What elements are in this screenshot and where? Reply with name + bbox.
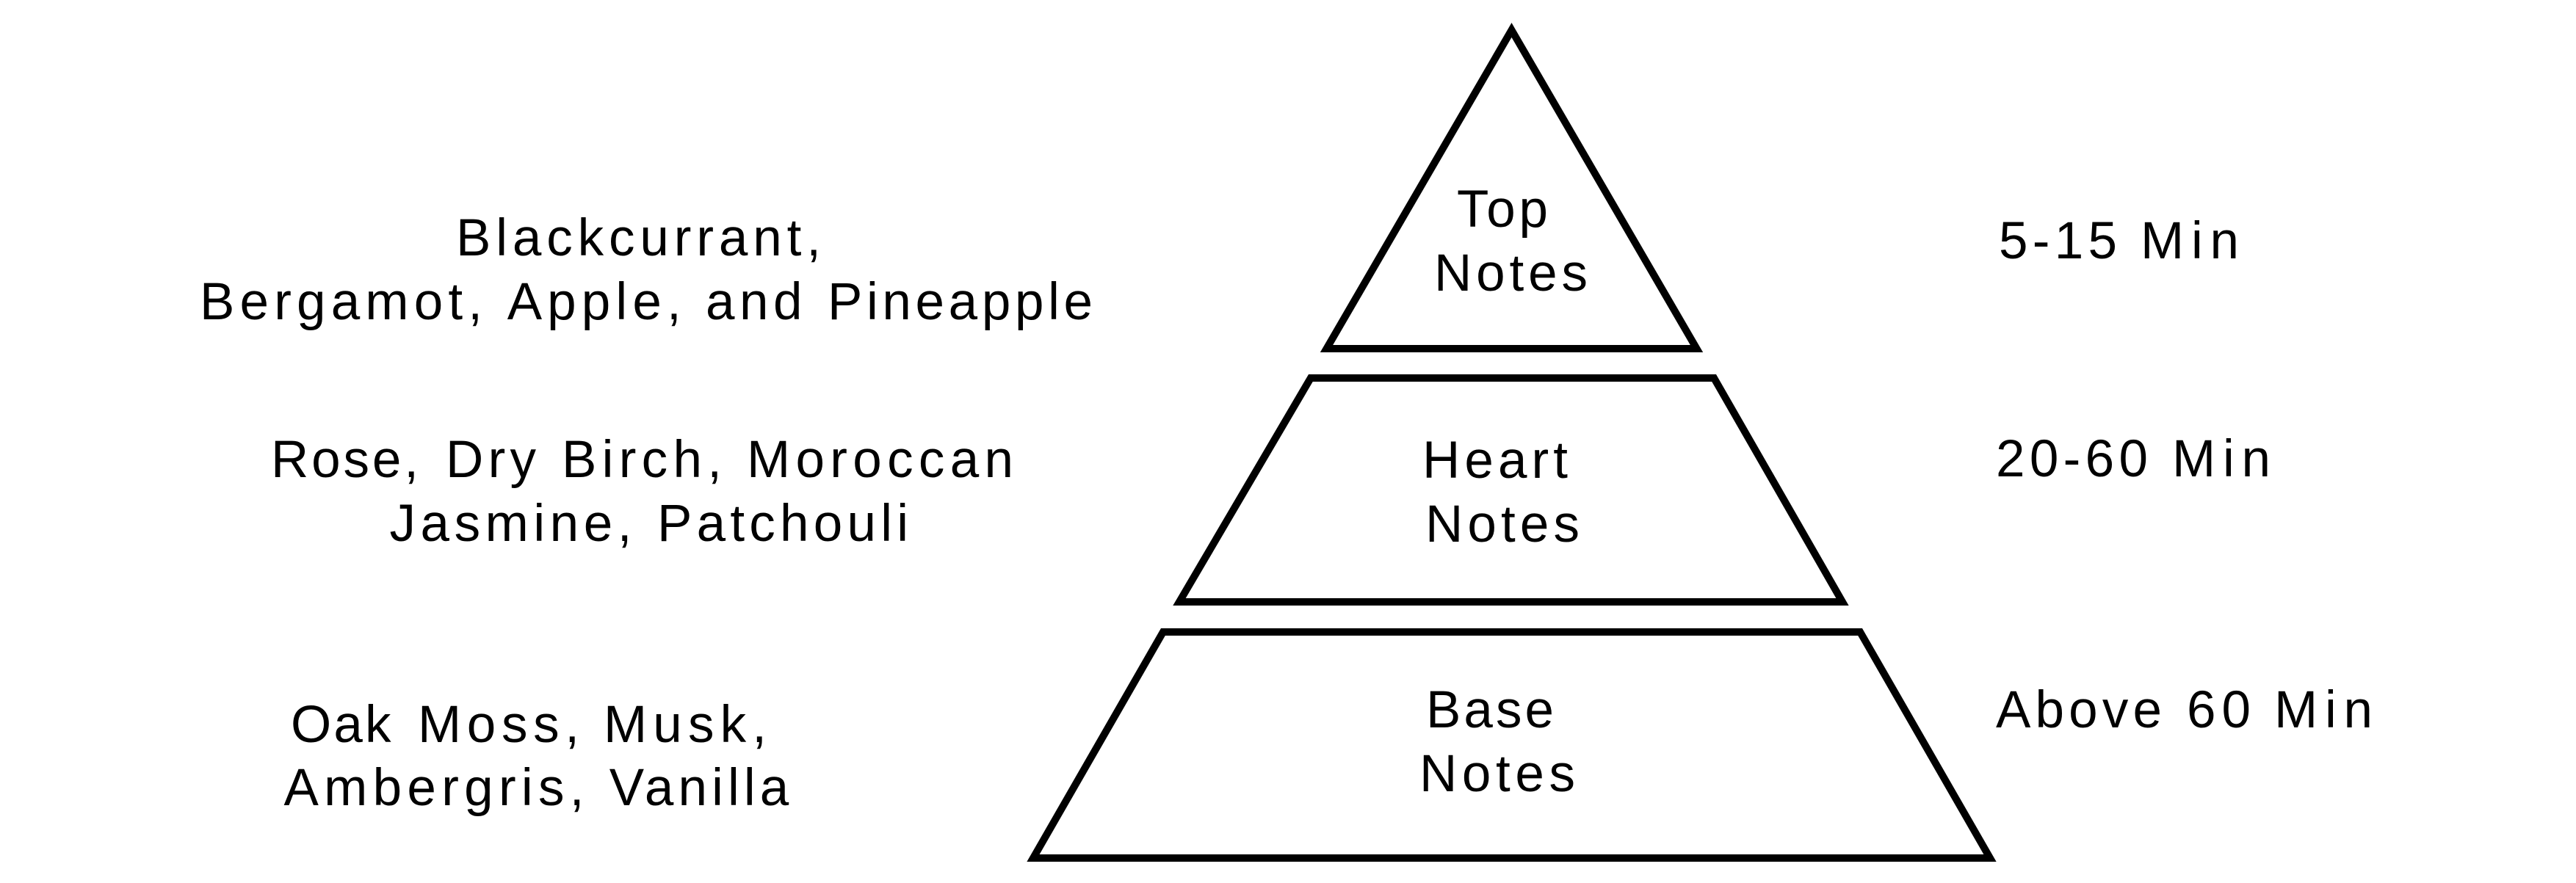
- ingredients: top notes: [200, 209, 1093, 331]
- ingredients: base notes: Musk,: [604, 696, 767, 754]
- duration: top notes: 5-15: [1999, 212, 2117, 270]
- ingredients: heart notes: Moroccan: [747, 431, 1013, 489]
- ingredients: base notes: Ambergris,: [283, 759, 585, 817]
- pyramid tier: base notes: Notes: [1419, 745, 1575, 803]
- ingredients: base notes: [283, 696, 789, 817]
- pyramid diagram: [1033, 30, 1990, 858]
- pyramid tier: top notes: Top: [1457, 181, 1548, 239]
- pyramid tier: heart notes: Heart: [1422, 432, 1568, 490]
- duration: heart notes: Min: [2172, 430, 2271, 488]
- ingredients: heart notes: Patchouli: [657, 495, 908, 553]
- ingredients: top notes: Bergamot,: [200, 273, 482, 331]
- duration: top notes: Min: [2141, 212, 2239, 270]
- pyramid tier: base notes: Base: [1426, 681, 1554, 739]
- ingredients: base notes: Moss,: [418, 696, 579, 754]
- ingredients: top notes: Pineapple: [828, 273, 1093, 331]
- duration: base notes: 60: [2187, 681, 2251, 739]
- pyramid tier: top notes: [1326, 30, 1696, 349]
- pyramid tier: heart notes: Notes: [1425, 495, 1580, 553]
- ingredients: top notes: Blackcurrant,: [456, 209, 821, 267]
- ingredients: top notes: and: [706, 273, 802, 331]
- duration: base notes: Above: [1996, 681, 2162, 739]
- ingredients: heart notes: Birch,: [562, 431, 722, 489]
- ingredients: heart notes: Rose,: [271, 431, 419, 489]
- duration: base notes: Min: [2274, 681, 2373, 739]
- duration: heart notes: [1996, 430, 2271, 488]
- duration: base notes: [1996, 681, 2373, 739]
- ingredients: base notes: Oak: [291, 696, 391, 754]
- pyramid tier: base notes: [1033, 632, 1990, 858]
- ingredients: base notes: Vanilla: [609, 759, 789, 817]
- pyramid tier: heart notes: [1179, 378, 1842, 602]
- duration: heart notes: 20-60: [1996, 430, 2148, 488]
- ingredients: heart notes: Jasmine,: [389, 495, 632, 553]
- ingredients: heart notes: Dry: [446, 431, 536, 489]
- duration: top notes: [1999, 212, 2239, 270]
- pyramid tier: top notes: Notes: [1434, 244, 1588, 302]
- ingredients: heart notes: [271, 431, 1013, 553]
- ingredients: top notes: Apple,: [507, 273, 681, 331]
